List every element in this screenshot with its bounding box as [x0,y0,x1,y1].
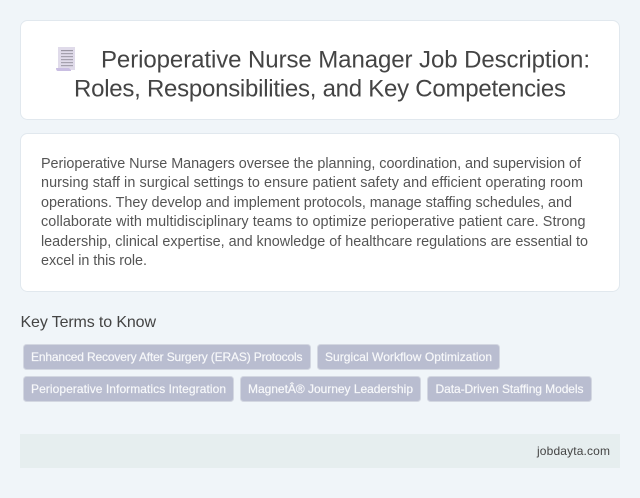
description text: Perioperative Nurse Managers oversee the planning, coordination, and supervision of [41,156,582,172]
chip: staffing models [428,376,592,402]
description text: collaborate with multidisciplinary teams to optimize perioperative patient care. Strong [41,214,586,230]
description text: operations. They develop and implement protocols, manage staffing schedules, and [41,195,572,211]
panel: title card [20,20,620,120]
heading: key terms: Key Terms to Know [20,314,156,331]
chip: staffing models: Data-Driven Staffing Models [436,382,584,396]
icon: document scroll [56,47,75,71]
description text: excel in this role. [41,253,147,269]
chip: ERAS protocols: Enhanced Recovery After Surgery (ERAS) Protocols [31,350,302,364]
chip: informatics: Perioperative Informatics Integration [31,382,226,396]
chips: key terms [24,344,592,402]
title [74,46,590,102]
chip: informatics [24,376,234,402]
chip: surgical workflow: Surgical Workflow Optimization [325,350,492,364]
chip: surgical workflow [318,344,500,370]
chip: magnet journey [240,376,420,402]
panel: description card [20,134,620,292]
description text: leadership, clinical expertise, and knowledge of healthcare regulations are essential to [41,234,588,250]
title: Perioperative Nurse Manager Job Description: [101,46,590,74]
chip: magnet journey: MagnetÂ® Journey Leadership [248,381,413,396]
description text: nursing staff in surgical settings to ensure patient safety and efficient operating room [41,175,583,191]
footer bar [20,434,620,468]
description text [41,156,588,269]
chip: ERAS protocols [24,344,310,370]
footer source text: jobdayta.com [536,444,610,458]
title: Roles, Responsibilities, and Key Competencies [74,76,566,102]
